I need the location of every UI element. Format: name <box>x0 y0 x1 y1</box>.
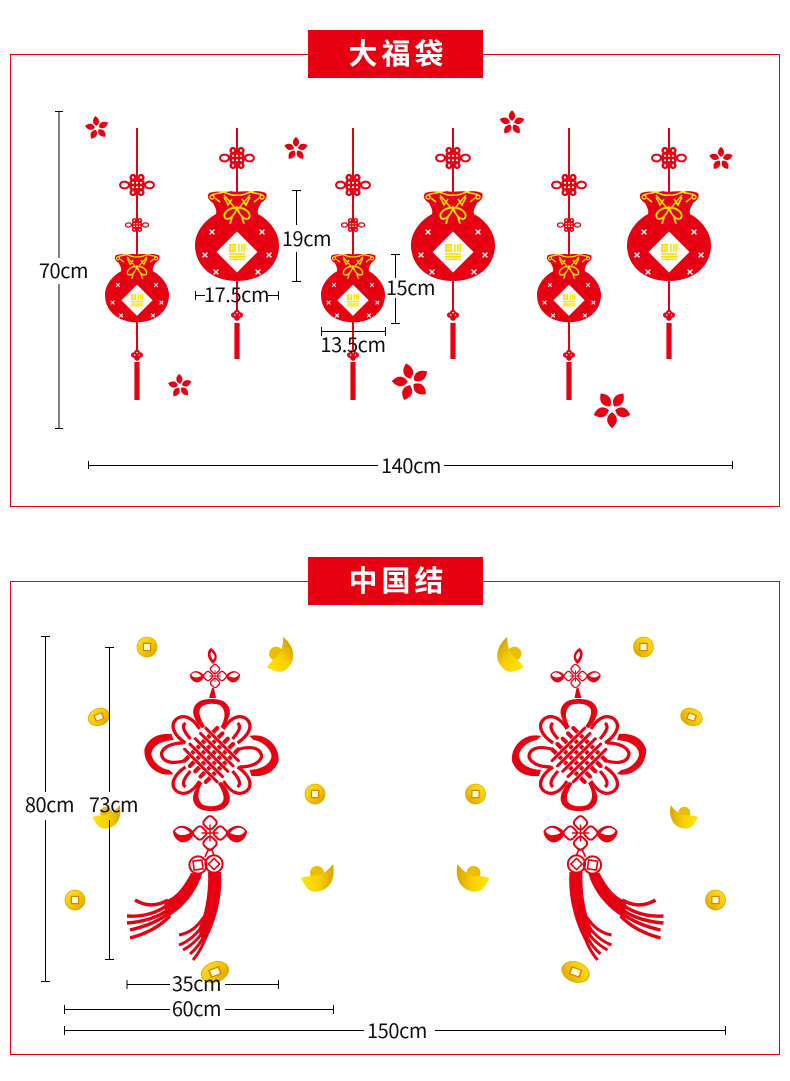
heading: 中国结: 中国结 <box>348 558 448 600</box>
dimension: small bag height 15cm <box>386 254 435 324</box>
panel: big lucky bag <box>10 30 780 506</box>
dimension: knot width 35cm: 35cm <box>172 968 221 997</box>
dimension: small bag height 15cm: 15cm <box>386 272 435 301</box>
dimension: total width 150cm: 150cm <box>367 1015 427 1044</box>
dimension: width 60cm: 60cm <box>172 993 221 1022</box>
dimension: small bag width 13.5cm: 13.5cm <box>320 329 386 358</box>
dimension: large bag height 19cm <box>282 190 331 282</box>
dimension: knot height 73cm <box>89 648 138 960</box>
heading: 中国结 <box>308 557 483 605</box>
right mirrored Chinese knot with gold coins and ingots <box>457 636 726 986</box>
dimension: total width 140cm <box>88 450 732 479</box>
heading: 大福袋: 大福袋 <box>348 31 448 73</box>
dimension: total width 150cm <box>64 1015 726 1044</box>
dimension: width 60cm <box>64 993 334 1022</box>
panel frame <box>10 582 780 1054</box>
dimension: overall height 80cm <box>25 636 74 982</box>
dimension: large bag width 17.5cm: 17.5cm <box>204 279 269 308</box>
dimension: total height 70cm <box>39 112 88 428</box>
panel: Chinese knot <box>10 557 780 1054</box>
hanging bags: small and large alternating <box>105 128 711 400</box>
dimension: overall height 80cm: 80cm <box>25 789 74 818</box>
heading: 大福袋 <box>308 30 483 78</box>
panel frame <box>10 54 780 506</box>
dimension: total height 70cm: 70cm <box>39 255 88 284</box>
dimension: knot width 35cm <box>127 968 278 997</box>
dimension: knot height 73cm: 73cm <box>89 789 138 818</box>
decoration: red blossoms <box>83 110 734 435</box>
dimension: total width 140cm: 140cm <box>381 450 441 479</box>
left Chinese knot with gold coins and ingots <box>65 636 334 986</box>
dimension: large bag height 19cm: 19cm <box>282 223 331 252</box>
